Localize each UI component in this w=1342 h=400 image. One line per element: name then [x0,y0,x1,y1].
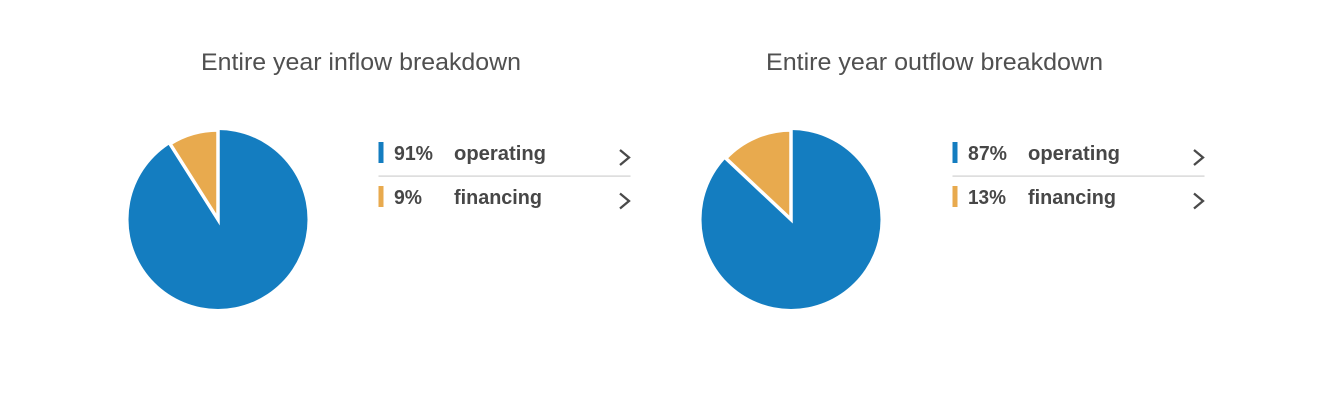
legend row: 9% financing: financing [454,187,542,209]
legend row: 87% operating: operating [1028,143,1120,165]
pie chart: outflow [702,130,880,309]
legend row: 13% financing: financing [1028,187,1116,209]
legend row: 91% operating: 91% [394,143,433,165]
legend row: 91% operating: operating [454,143,546,165]
legend row: 13% financing: 13% [968,187,1006,209]
heading: inflow: Entire year inflow breakdown [201,49,521,76]
legend row: 87% operating [952,142,1203,165]
legend row: 9% financing: 9% [394,187,422,209]
legend row: 13% financing [952,186,1203,209]
panel: inflow breakdown [128,49,630,309]
legend row: 91% operating [378,142,629,165]
heading: outflow: Entire year outflow breakdown [766,49,1103,76]
pie chart: inflow [128,130,308,309]
legend row: 9% financing [378,186,629,209]
panel: outflow breakdown [702,49,1204,309]
legend row: 87% operating: 87% [968,143,1007,165]
